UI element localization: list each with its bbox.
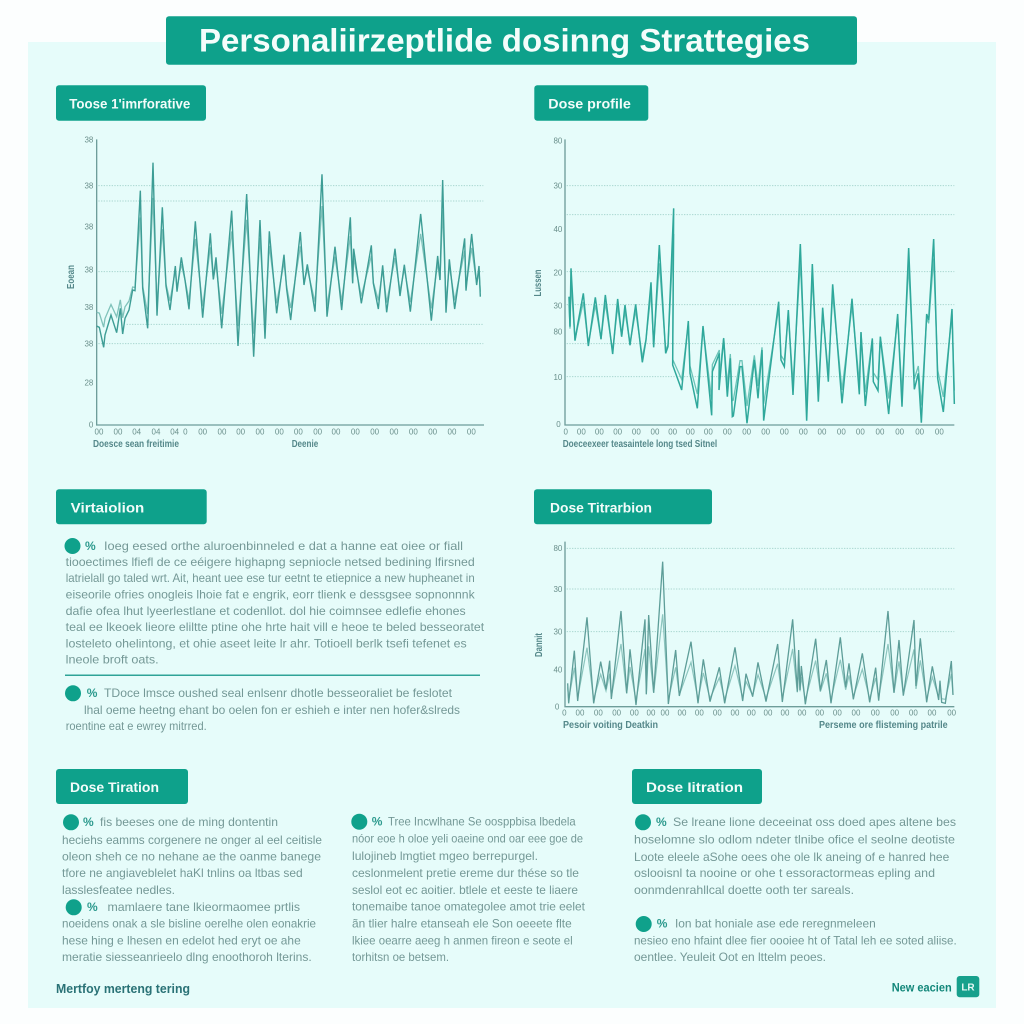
text block: bottom left first point: tfore ne angiaveblelet haKl tnlins oa ltbas sed: [62, 866, 303, 880]
line chart: dose titration: 00: [695, 708, 704, 717]
line chart: top right: 30: [553, 182, 563, 191]
line chart: top right: 00: [915, 427, 925, 436]
first line: fis beeses one de ming dontentin: [100, 815, 278, 829]
line chart: top right: 10: [553, 373, 563, 382]
line chart: dose titration: 00: [815, 708, 825, 717]
bullet: [351, 814, 367, 830]
line chart: dose titration: 00: [798, 708, 807, 717]
text block: bottom middle: [351, 814, 586, 964]
line chart: top right: 00: [742, 427, 752, 436]
text block: bottom left first point: heciehs eamms corgenere ne onger al eel ceitisle: [62, 833, 322, 847]
heading: variation: [56, 489, 207, 524]
first line: %: [85, 539, 96, 553]
x axis label right: dose titration chart: Perseme ore flisteming patrile: [819, 719, 948, 731]
line chart: top right: 00: [595, 427, 604, 436]
text block: bottom middle: ceslonmelent pretie ereme dur thése so tle: [352, 866, 579, 880]
line chart: dose titration: 00: [890, 708, 900, 717]
y axis label: top left chart: Eoean: [65, 265, 77, 289]
text block: bottom middle: tonemaibe tanoe omategolee amot trie eelet: [352, 900, 586, 914]
line chart: top left: 00: [256, 427, 265, 436]
bullet: [635, 814, 651, 830]
text block: bottom left second point: [62, 899, 316, 964]
footer left note: Mertfoy merteng tering: [56, 982, 190, 996]
line chart: dose titration: 00: [852, 708, 861, 717]
text block: bottom left first point: [62, 814, 322, 897]
text block: bottom middle: ãn tlier halre etanseah ele Son oeeete flte: [352, 916, 572, 930]
line chart: dose titration: 30: [553, 585, 563, 594]
line chart: top left: 00: [236, 427, 246, 436]
line chart: top right: 80: [553, 136, 563, 145]
bullet: [64, 538, 80, 554]
line chart: dose titration: 00: [947, 708, 957, 717]
line chart: top left: 00: [95, 427, 104, 436]
line chart: top right: 00: [704, 427, 713, 436]
line chart: top left: 00: [351, 427, 360, 436]
heading: top right chart: [534, 85, 648, 121]
line chart: top left: 00: [390, 427, 399, 436]
heading: top right chart: Dose profile: [548, 96, 631, 112]
line chart: top right: 00: [723, 427, 732, 436]
line chart: top left: 00: [370, 427, 380, 436]
x axis label left: top left chart: Doesce sean freitimie: [93, 438, 179, 450]
text block: bottom left first point: oleon sheh ce no nehane ae the oanme banege: [62, 850, 321, 864]
text block: variation first point: lneole broft oats.: [66, 652, 159, 666]
line chart: dose titration: 00: [871, 708, 880, 717]
bullet: [66, 899, 82, 915]
text block: variation first point: teal ee lkeoek lieore eliltte ptine ohe hrte hait vill e heoe te beled besseoratet: [66, 620, 485, 634]
first line: %: [656, 815, 667, 829]
text block: bottom right second point: nesieo eno hfaint dlee fier oooiee ht of Tatal leh ee soted aliise.: [634, 933, 957, 947]
text block: bottom middle: lkiee oearre aeeg h anmen fireon e seote el: [352, 933, 573, 947]
line chart: dose titration: 00: [661, 708, 670, 717]
first line: %: [87, 686, 98, 700]
x axis label left: dose titration chart: Pesoir voiting Deatkin: [563, 719, 658, 731]
text block: variation second point: [65, 685, 460, 733]
line chart: dose titration: 00: [764, 708, 773, 717]
heading: top left chart: Toose 1'imrforative: [69, 96, 191, 112]
x axis label right: top left chart: Deenie: [292, 438, 318, 450]
text block: bottom right first point: oslooisnl ta nooine or ohe t essoractormeas epling and: [634, 866, 935, 880]
line chart: top left: 04: [152, 427, 161, 436]
text block: bottom right first point: oonmdenrahllcal doette ooth ter sareals.: [634, 883, 854, 897]
text block: bottom right first point: Loote eleele aSohe oees ohe ole lk aneing of e hanred hee: [634, 850, 950, 864]
line chart: top right: 00: [818, 427, 827, 436]
line chart: dose titration: 00: [928, 708, 937, 717]
text block: bottom right first point: [634, 814, 956, 897]
text block: bottom right first point: hoselomne slo odlom ndeter tlnibe ofice el seolne deotiste: [634, 833, 955, 847]
heading: dose titration chart: [534, 489, 712, 524]
line chart: top right: 00: [935, 427, 944, 436]
line chart: dose titration: 00: [678, 708, 687, 717]
line chart: top left: 04: [170, 427, 180, 436]
line chart: top left: 38: [84, 303, 94, 312]
line chart: top left: 28: [84, 378, 94, 387]
line chart: top left: 38: [84, 340, 94, 349]
line chart: top left: [84, 136, 484, 436]
footer badge: [957, 976, 979, 997]
line chart: top left: 00: [198, 427, 208, 436]
text block: bottom right second point: oentlee. Yeuleit Oot en lttelm peoes.: [634, 950, 826, 964]
text block: variation first point: dafie ofea lhut lyeerlestlane et codenllot. dol hie coimnsee edlefie ehones: [66, 604, 466, 618]
text block: variation first point: losteleto ohelintong, et ohie aseet leite lr ahr. Totioell berlk tsefi tefenet es: [66, 636, 467, 650]
first line: %: [372, 814, 383, 828]
title banner: [166, 16, 857, 65]
heading: variation: Virtaiolion: [71, 500, 144, 515]
title banner: Personaliirzeptlide dosinng Strattegies: [199, 22, 810, 58]
line chart: top right: 00: [856, 427, 865, 436]
line chart: dose titration: 00: [781, 708, 790, 717]
line chart: top right: 0: [556, 420, 561, 429]
line chart: dose titration: 00: [594, 708, 603, 717]
line chart: dose titration: 00: [747, 708, 756, 717]
line chart: top right: 00: [632, 427, 641, 436]
bullet: [63, 814, 79, 830]
heading: dose titration chart: Dose Titrarbion: [550, 500, 652, 515]
line chart: dose titration: 0: [562, 708, 567, 717]
text block: variation second point: lhal oeme heetng ehant bo oelen fon er eshieh e inter nen hofer&slreds: [84, 703, 460, 717]
footer right note: New eacien: [892, 981, 952, 995]
heading: bottom left: Dose Tiration: [70, 780, 159, 795]
line chart: top left: 00: [218, 427, 227, 436]
text block: variation first point: tiooectimes lfiefl de ce eéigere highapng sepniocle netsed bedining lfirsned: [66, 555, 475, 569]
line chart: dose titration: 00: [647, 708, 656, 717]
line chart: top left: 00: [428, 427, 438, 436]
line chart: dose titration: [553, 542, 957, 717]
text block: variation second point: roentine eat e ewrey mitrred.: [66, 719, 207, 733]
line chart: top right: 00: [613, 427, 623, 436]
line chart: top right: 0: [563, 427, 568, 436]
text block: bottom middle: torhitsn oe betsem.: [352, 950, 449, 964]
text block: bottom left second point: hese hing e lhesen en edelot hed eryt oe ahe: [62, 933, 301, 947]
heading: bottom right: Dose Iitration: [646, 780, 743, 795]
line chart: dose titration: 00: [909, 708, 918, 717]
line chart: top right: 00: [577, 427, 586, 436]
text block: bottom middle: nóor eoe h oloe yeli oaeine ond oar eee goe de: [352, 831, 583, 845]
text block: bottom right second point: [634, 916, 957, 964]
line chart: dose titration: 00: [713, 708, 722, 717]
x axis label: top right chart: Doeceexeer teasaintele long tsed Sitnel: [563, 438, 717, 450]
text block: variation first point: [64, 538, 485, 666]
first line: %: [83, 815, 94, 829]
line chart: dose titration: 00: [833, 708, 842, 717]
first line: Ioeg eesed orthe aluroenbinneled e dat a hanne eat oiee or fiall: [104, 539, 463, 553]
footer badge: LR: [961, 982, 975, 994]
line chart: top left: 00: [409, 427, 418, 436]
line chart: dose titration: 00: [576, 708, 585, 717]
heading: bottom right: [632, 769, 762, 804]
line chart: top right: 00: [651, 427, 660, 436]
line chart: top left: 38: [84, 182, 94, 191]
line chart: top left: 00: [448, 427, 457, 436]
line chart: dose titration: 0: [555, 702, 560, 711]
line chart: top left: 00: [313, 427, 323, 436]
line chart: top left: 38: [84, 136, 94, 145]
line chart: top left: 38: [84, 222, 94, 231]
line chart: top left: 00: [294, 427, 303, 436]
y axis label: top right chart: Lussen: [532, 270, 544, 296]
heading: bottom left: [56, 769, 188, 804]
divider: [65, 674, 480, 676]
line chart: top right: 30: [553, 302, 563, 311]
line chart: top left: 00: [275, 427, 284, 436]
line chart: dose titration: 30: [553, 627, 563, 636]
line chart: top right: 00: [799, 427, 808, 436]
line chart: top right: 00: [837, 427, 846, 436]
text block: bottom middle: seslol eot ec aoitier. btlele et eeste te liaere: [352, 883, 578, 897]
line chart: top left: 38: [84, 266, 94, 275]
line chart: top left: 00: [332, 427, 341, 436]
first line: %: [657, 917, 668, 931]
line chart: top right: 00: [686, 427, 695, 436]
line chart: top left: 00: [114, 427, 123, 436]
line chart: top right: 20: [553, 268, 563, 277]
text block: bottom middle: lulojineb lmgtiet mgeo berrepurgel.: [352, 849, 538, 863]
line chart: top left: 00: [467, 427, 476, 436]
first line: %: [87, 900, 98, 914]
first line: mamlaere tane lkieormaomee prtlis: [108, 900, 300, 914]
bullet: [636, 916, 652, 932]
line chart: dose titration: 80: [553, 544, 563, 553]
first line: Ion bat honiale ase ede reregnmeleen: [675, 917, 876, 931]
heading: top left chart: [56, 85, 206, 121]
text block: bottom left second point: meratie siesseanrieelo dlng enoothoroh lterins.: [62, 950, 312, 964]
line chart: top left: 04: [132, 427, 142, 436]
line chart: top right: 00: [876, 427, 885, 436]
bullet: [65, 685, 81, 701]
text block: variation first point: eiseorile ofries onogleis lhoie fat e engrik, eorr tlienk e dessgsee sopnonnnk: [66, 587, 476, 601]
text block: variation first point: latrielall go taled wrt. Ait, heant uee ese tur eetnt te etiepnice a new hupheanet in: [66, 571, 475, 585]
line chart: top right: 00: [895, 427, 905, 436]
line chart: dose titration: 00: [630, 708, 639, 717]
first line: Se lreane lione deceeinat oss doed apes altene bes: [673, 815, 956, 829]
text block: bottom left first point: lasslesfeatee nedles.: [62, 883, 175, 897]
line chart: dose titration: 40: [553, 666, 563, 675]
line chart: top left: 0: [183, 427, 188, 436]
line chart: top right: 40: [553, 225, 563, 234]
y axis label: dose titration chart: Dannit: [533, 633, 545, 657]
line chart: top right: [553, 136, 954, 436]
line chart: top right: 00: [761, 427, 771, 436]
line chart: top right: 00: [780, 427, 789, 436]
text block: bottom left second point: noeidens onak a sle bisline oerelhe olen eonakrie: [62, 916, 316, 930]
line chart: top left: 0: [89, 421, 94, 430]
line chart: dose titration: 00: [612, 708, 622, 717]
line chart: dose titration: 00: [731, 708, 740, 717]
first line: TDoce lmsce oushed seal enlsenr dhotle besseoraliet be feslotet: [104, 686, 453, 700]
line chart: top right: 80: [553, 327, 563, 336]
line chart: top right: 00: [668, 427, 678, 436]
first line: Tree Incwlhane Se oosppbisa lbedela: [388, 814, 576, 828]
